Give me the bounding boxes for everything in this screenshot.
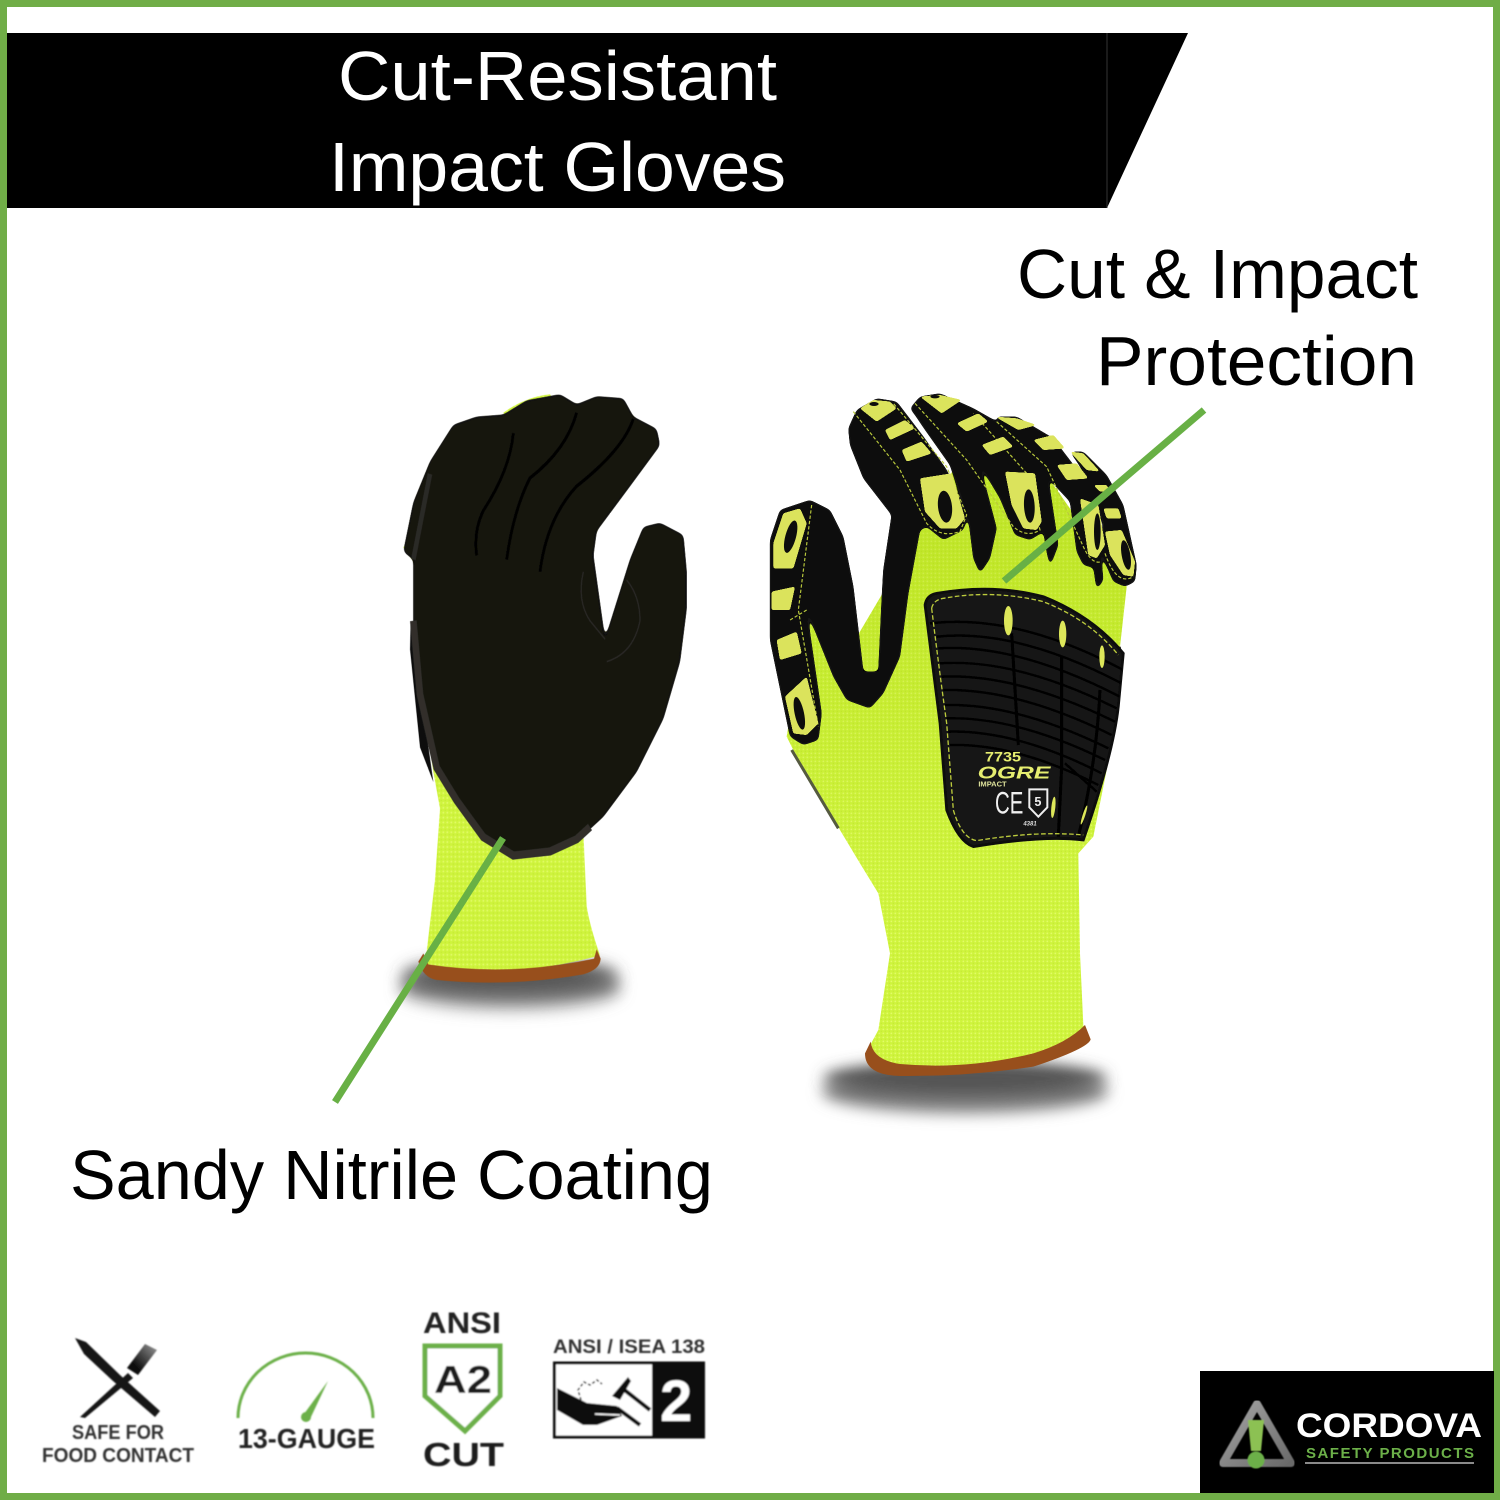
pad markings: model number and logo [978,749,1051,828]
icon: ANSI A2 cut shield: ANSI [423,1307,501,1340]
label: sandy nitrile coating: Sandy Nitrile Coating [70,1136,713,1214]
icon: ANSI A2 cut shield [423,1307,504,1473]
icon: ANSI/ISEA 138 impact level 2: 2 [660,1369,692,1434]
pad markings: model number and logo: 5 [1034,795,1041,809]
logo: Cordova Safety Products: SAFETY PRODUCTS [1306,1445,1474,1462]
icon: ANSI A2 cut shield: A2 [434,1359,492,1402]
icon: ANSI/ISEA 138 impact level 2 [553,1337,705,1438]
cuff hem [865,1025,1091,1076]
pad markings: model number and logo: 7735 [985,749,1021,765]
label: cut and impact protection: Protection [1096,322,1417,400]
pad markings: model number and logo: IMPACT [978,779,1007,788]
black palm wrap and fingers [770,393,1137,745]
finger and thumb stitching [790,403,1133,727]
icon: safe for food contact: FOOD CONTACT [42,1445,194,1467]
title text: Impact Gloves [329,128,786,206]
left glove: palm view [398,394,687,1007]
label: cut and impact protection: Cut & Impact [1017,235,1418,313]
logo: Cordova Safety Products: CORDOVA [1296,1407,1482,1445]
back-of-hand impact pad [925,589,1123,847]
leader line: sandy nitrile coating [335,838,503,1102]
logo: Cordova Safety Products [1200,1371,1494,1493]
icon: safe for food contact [42,1338,194,1467]
knit shell [787,463,1127,1070]
pad markings: model number and logo: 4381 [1022,822,1037,828]
pad markings: model number and logo: OGRE [978,763,1051,783]
title text: Cut-Resistant [338,37,777,115]
back-of-hand sliver and cuff [403,394,600,972]
icon: safe for food contact: SAFE FOR [72,1422,164,1444]
logo triangle mark [1223,1404,1291,1468]
title text [329,37,786,206]
leader line: cut and impact protection [1004,410,1204,581]
title banner [7,33,1188,208]
icon: 13-gauge: 13-GAUGE [238,1423,375,1454]
label: cut and impact protection [1017,235,1418,400]
icon: ANSI/ISEA 138 impact level 2: ANSI / ISEA 138 [553,1337,705,1358]
pad markings: model number and logo: CE [995,785,1023,820]
icon: ANSI A2 cut shield: CUT [423,1436,504,1473]
yellow rubber pads [772,395,1135,735]
icon: 13-gauge [238,1353,375,1454]
right glove: back view [770,393,1137,1113]
